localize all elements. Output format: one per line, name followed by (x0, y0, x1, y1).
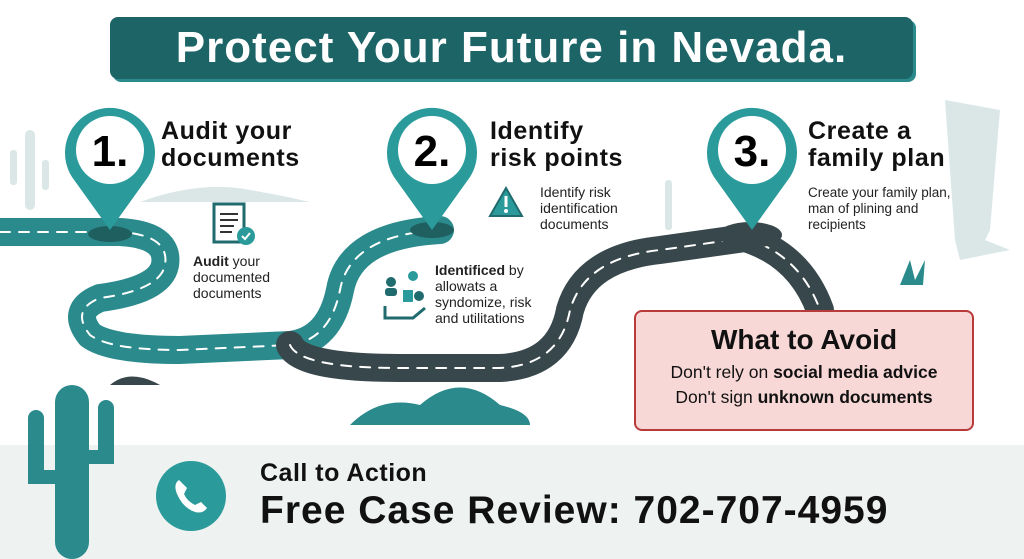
step 2 warning text: documents (540, 216, 608, 232)
callout: what to avoid: What to Avoid (711, 324, 897, 355)
step 2 heading: risk points (490, 144, 623, 172)
pin 3 (707, 108, 797, 230)
pin 3: 3. (734, 127, 770, 176)
call to action: Free Case Review: 702-707-4959 (260, 489, 888, 532)
step 3 heading: family plan (808, 144, 945, 172)
pin 2: 2. (414, 127, 450, 176)
step 1 text: documented (193, 269, 270, 285)
step 1 heading: documents (161, 144, 300, 172)
icon: document (212, 202, 255, 245)
road teal (0, 230, 820, 368)
title: Protect Your Future in Nevada. (176, 23, 847, 72)
step 2 warning text: Identify risk (540, 184, 611, 200)
step 1 text: documents (193, 285, 261, 301)
pin 2 (387, 108, 477, 230)
step 3 heading: Create a (808, 117, 911, 145)
pin 1: 1. (92, 127, 128, 176)
pin 1 (65, 108, 155, 230)
step 2 heading: Identify (490, 117, 584, 145)
step 1 heading (161, 117, 300, 172)
callout: what to avoid: Don't sign unknown documents (675, 387, 933, 407)
decorative cacti (10, 100, 1010, 260)
step 3 text: man of plining and (808, 201, 918, 216)
step 3 text (808, 185, 951, 232)
icon: phone (156, 461, 226, 531)
step 2 detail text: and utilitations (435, 310, 525, 326)
icon: warning (488, 186, 524, 217)
callout: what to avoid (634, 310, 974, 431)
icon: people hand (384, 271, 426, 320)
step 2 detail text (435, 262, 532, 326)
step 2 warning text (540, 184, 618, 232)
title (110, 17, 913, 79)
step 3 heading (808, 117, 945, 172)
step 1 text: Audit your (193, 253, 260, 269)
call to action (260, 459, 888, 532)
step 2 detail text: syndomize, risk (435, 294, 531, 310)
step 3 text: Create your family plan, (808, 185, 951, 200)
step 1 text (193, 253, 270, 301)
step 2 detail text: allowats a (435, 278, 497, 294)
callout: what to avoid: Don't rely on social media advice (671, 362, 937, 382)
step 2 warning text: identification (540, 200, 618, 216)
step 2 detail text: Identificed by (435, 262, 524, 278)
big cactus (28, 385, 114, 559)
call to action: Call to Action (260, 459, 427, 487)
step 3 text: recipients (808, 217, 866, 232)
step 2 heading (490, 117, 623, 172)
step 1 heading: Audit your (161, 117, 292, 145)
